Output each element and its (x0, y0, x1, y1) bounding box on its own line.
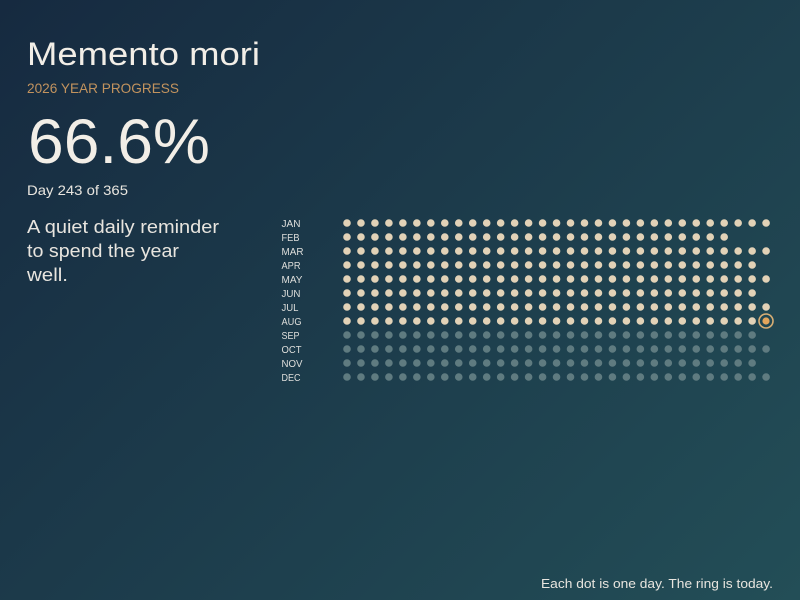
dot grid: days of the year (347, 223, 766, 377)
reminder text: A quiet daily reminder (27, 217, 219, 237)
month labels: SEP (282, 331, 300, 342)
month labels: NOV (282, 359, 303, 370)
month labels: FEB (282, 233, 300, 244)
big percentage: 66.6% (28, 107, 210, 177)
reminder text (26, 217, 219, 285)
month labels: JUN (282, 289, 300, 300)
title: Memento mori (27, 36, 260, 72)
footnote: Each dot is one day. The ring is today. (541, 576, 773, 591)
month labels: JAN (282, 219, 300, 230)
month labels: AUG (282, 317, 302, 328)
month labels: MAY (282, 275, 303, 286)
reminder text: to spend the year (27, 241, 179, 261)
month labels: OCT (282, 345, 302, 356)
month labels: MAR (282, 247, 304, 258)
subtitle: year progress: 2026 YEAR PROGRESS (27, 80, 179, 96)
month labels: JUL (282, 303, 299, 314)
month labels: APR (282, 261, 300, 272)
month labels (282, 219, 304, 384)
day counter: Day 243 of 365 (27, 182, 128, 198)
today marker: ring and dot (759, 314, 773, 328)
reminder text: well. (26, 265, 68, 285)
month labels: DEC (282, 373, 300, 384)
